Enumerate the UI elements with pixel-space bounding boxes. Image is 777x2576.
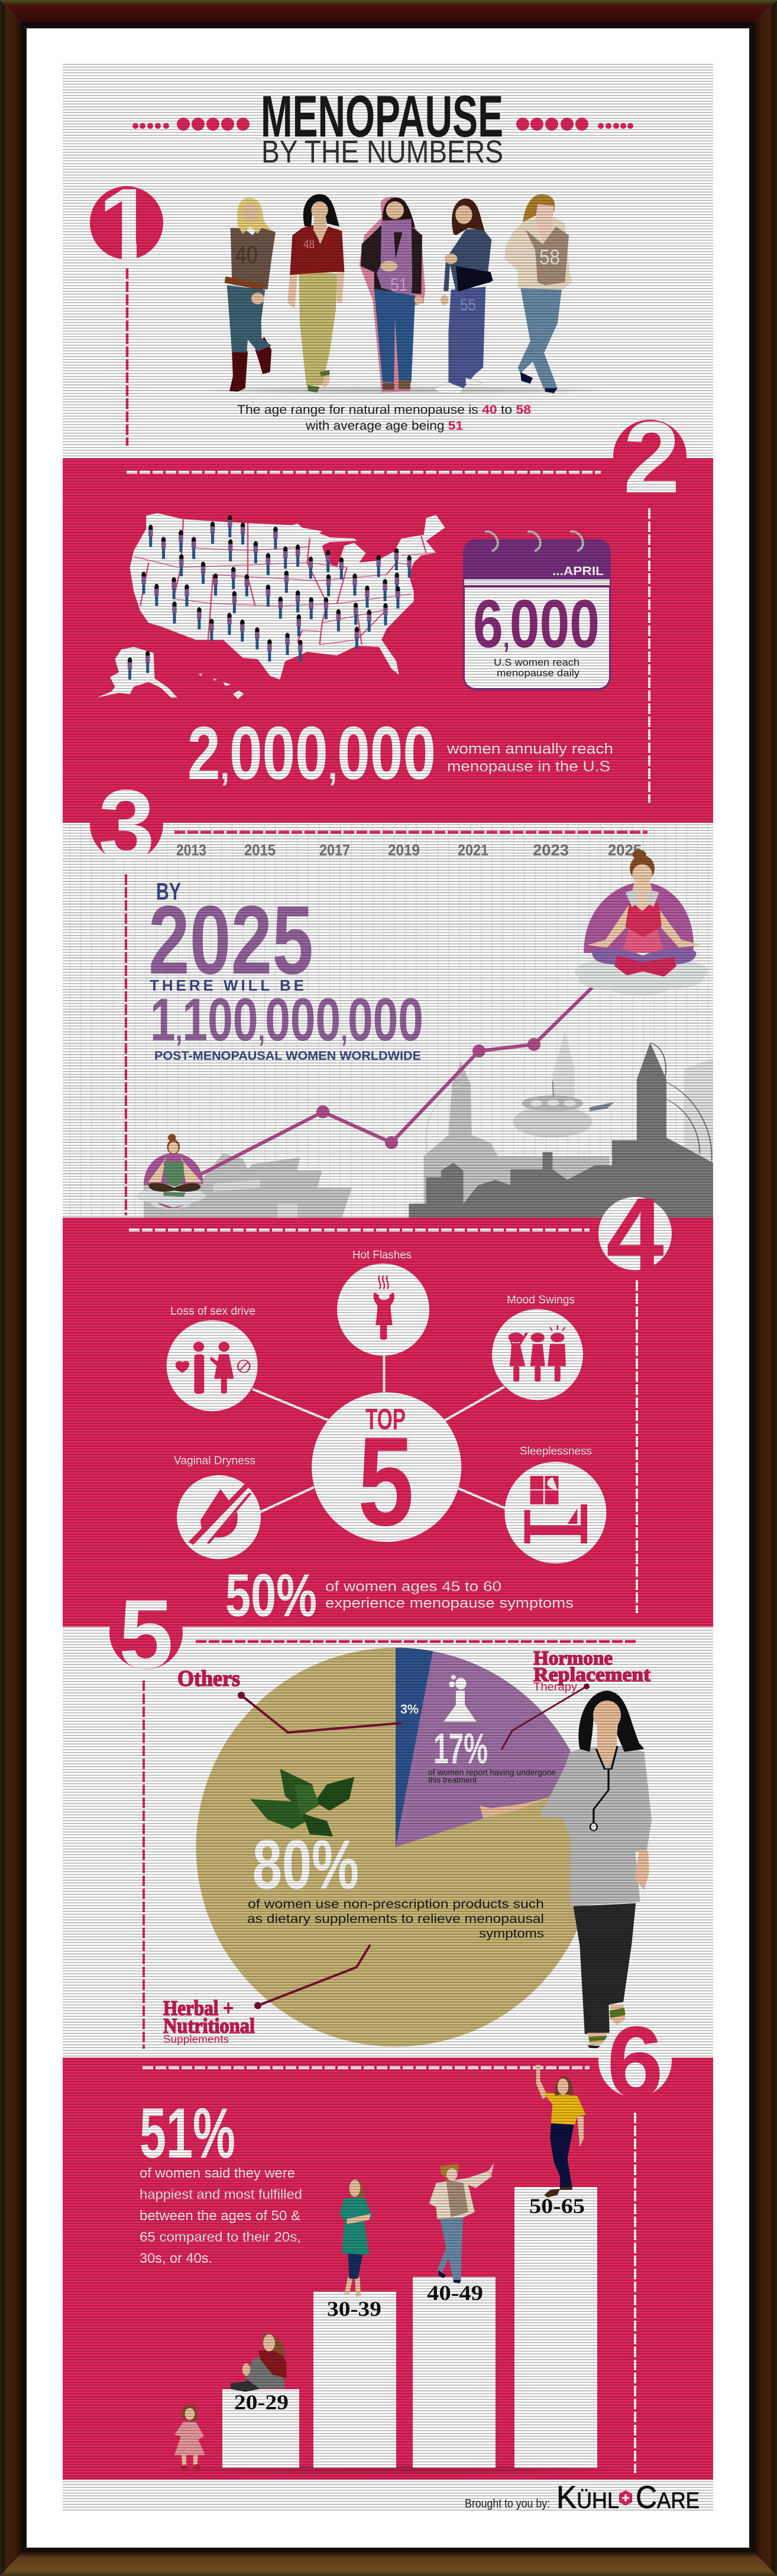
- calendar caption 1: U.S women reach: [494, 657, 579, 668]
- caption line 1: The age range for natural menopause is 40 to 58: [237, 403, 531, 417]
- dashed line horizontal: [196, 1640, 638, 1643]
- label: Mood Swings: [507, 1294, 575, 1306]
- woman doctor: [480, 1691, 652, 2048]
- Alaska: [96, 647, 177, 697]
- label: Herbal: Herbal +: [163, 1996, 234, 2020]
- bar: 20-29: [222, 2389, 299, 2468]
- icon: green leaves: [250, 1769, 354, 1837]
- year labels: [176, 841, 642, 859]
- panel: section 3 projection: [63, 823, 713, 1218]
- label: 20-29: [234, 2390, 289, 2414]
- calendar: [463, 531, 611, 690]
- figure: seated woman: [231, 2334, 286, 2392]
- icon: bed and window: [525, 1476, 587, 1543]
- pie label: 80%: 80%: [252, 1826, 359, 1904]
- stat text: post-menopausal women: POST-MENOPAUSAL WOMEN WORLDWIDE: [154, 1049, 421, 1063]
- symptom: sleeplessness: [504, 1445, 606, 1563]
- month label: ...APRIL: [552, 564, 604, 578]
- figure: girl: [174, 2405, 205, 2471]
- woman aged 40: [225, 197, 276, 392]
- contiguous states: [130, 513, 445, 680]
- stat caption 1: of women ages 45 to 60: [325, 1579, 501, 1595]
- panel: section 1 age range: [63, 64, 713, 459]
- figure: woman in green dress: [339, 2179, 373, 2296]
- stat caption: of women said they were: [140, 2165, 295, 2181]
- panel: section 5 treatments: [63, 1627, 713, 2058]
- numeral 2: 2: [623, 401, 680, 514]
- numeral 4: 4: [606, 1177, 664, 1293]
- bar: 40-49: [413, 2277, 496, 2468]
- icon: flask: [443, 1675, 477, 1722]
- stat caption 1: women annually reach: [446, 741, 613, 757]
- callout: herbal and nutritional supplements: [163, 1945, 370, 2045]
- year labels: 2021: [458, 841, 488, 859]
- symptom: loss of sex drive: [167, 1305, 258, 1412]
- label: Others: [177, 1666, 240, 1691]
- label: Replacement: Replacement: [533, 1664, 651, 1686]
- dashed line horizontal: [129, 1228, 590, 1232]
- stat: 51%: 51%: [140, 2094, 235, 2173]
- panel: section 2 US: [63, 458, 713, 823]
- Hawaii: [198, 673, 244, 699]
- stat text: by: BY: [156, 878, 181, 905]
- pie label: 3%: 3%: [400, 1702, 419, 1717]
- label: 40-49: [427, 2281, 483, 2305]
- icon: meditating woman small: [136, 1134, 206, 1209]
- calendar rings: [485, 531, 583, 551]
- hub: top 5: [312, 1393, 461, 1552]
- year labels: 2023: [533, 841, 569, 859]
- year labels: 2025: [608, 841, 642, 859]
- woman aged 48: [287, 194, 344, 392]
- icon: crossed-out drop: [188, 1484, 252, 1547]
- icon: meditating woman large: [575, 850, 708, 995]
- icon: woman with heat waves: [374, 1276, 394, 1340]
- 6,000: 6,000: [473, 586, 600, 662]
- dashed line vertical: [636, 1280, 638, 1613]
- number on woman 51: 51: [390, 274, 407, 295]
- panel: section 6 happiness: [63, 2058, 713, 2480]
- numeral 5: 5: [358, 1411, 414, 1552]
- stat text: 2025: 2025: [148, 885, 313, 994]
- bar: 50-65: [514, 2187, 597, 2468]
- callout: others: [177, 1666, 402, 1733]
- woman aged 55: [433, 199, 493, 393]
- dashed line horizontal: [143, 2066, 590, 2069]
- connector lines: [252, 1354, 506, 1512]
- figure: woman pointing: [429, 2163, 494, 2283]
- illustration: five women: [225, 194, 572, 393]
- label: Nutritional: Nutritional: [163, 2014, 255, 2038]
- dashed line vertical: [634, 2113, 636, 2473]
- logo: cross: [619, 2490, 632, 2506]
- figure: woman in yellow: [536, 2065, 586, 2197]
- pie label: 17%: 17%: [433, 1725, 488, 1773]
- decorative dots: right: [516, 118, 633, 131]
- stat text: there will be: THERE WILL BE: [150, 976, 304, 994]
- year labels: 2019: [388, 841, 420, 859]
- dashed line horizontal: [174, 831, 648, 833]
- logo: Care: CARE: [636, 2480, 700, 2515]
- dashed line vertical: [143, 1680, 145, 2049]
- year labels: 2013: [176, 841, 206, 859]
- panel: section 4 symptoms: [63, 1218, 713, 1629]
- label: 30-39: [327, 2297, 381, 2321]
- symptom: mood swings: [492, 1294, 583, 1400]
- stat caption: between the ages of 50 &: [140, 2208, 300, 2223]
- dashed line vertical: [648, 508, 650, 803]
- label: Hot Flashes: [352, 1249, 412, 1261]
- stat caption: 65 compared to their 20s,: [140, 2229, 301, 2244]
- numeral 3: 3: [98, 769, 155, 883]
- 17% caption second line: this treatment: [428, 1775, 477, 1785]
- numeral 6: 6: [607, 2006, 663, 2119]
- dashed line: [126, 268, 128, 446]
- footer: [63, 2480, 713, 2515]
- number on woman 40: 40: [235, 241, 258, 268]
- dashed line vertical: [125, 874, 127, 1215]
- floor shadow: [148, 2465, 633, 2474]
- icon: couple with broken heart: [176, 1342, 250, 1394]
- 80% caption 1: of women use non-prescription products such: [248, 1897, 544, 1911]
- number on woman 48: 48: [303, 238, 315, 251]
- subtitle: by the numbers: BY THE NUMBERS: [261, 134, 503, 170]
- label: Sleeplessness: [520, 1445, 592, 1458]
- symptom: hot flashes: [337, 1249, 429, 1356]
- title: Menopause: MENOPAUSE: [261, 83, 503, 149]
- woman aged 51 highlighted: [360, 197, 425, 392]
- caption line 2: with average age being 51: [305, 419, 463, 433]
- numeral 1: [90, 186, 163, 259]
- floor shadow: [191, 386, 617, 394]
- decorative dots: left: [132, 118, 250, 131]
- stat caption: happiest and most fulfilled: [140, 2186, 302, 2202]
- 17% caption: of women report having undergone: [428, 1767, 556, 1777]
- calendar caption 2: menopause daily: [497, 667, 580, 679]
- symptom: vaginal dryness: [174, 1455, 261, 1559]
- dashed line horizontal: [127, 471, 601, 474]
- line chart: [196, 986, 594, 1177]
- stat caption: 30s, or 40s.: [140, 2250, 212, 2266]
- label: Therapy: Therapy: [533, 1681, 578, 1693]
- state borders: [134, 519, 436, 644]
- label: Hormone: Hormone: [533, 1647, 613, 1669]
- stat caption: [140, 2165, 302, 2266]
- label: Supplements: Supplements: [163, 2033, 229, 2045]
- 80% caption 3: symptoms: [479, 1927, 544, 1941]
- stat: 50%: 50%: [225, 1562, 317, 1629]
- callout: hormone replacement therapy: [501, 1647, 651, 1750]
- numeral 5: 5: [119, 1580, 173, 1689]
- logo: Kuhl: KÜHL: [556, 2480, 619, 2515]
- year labels: 2015: [244, 841, 276, 859]
- numeral 1: 1: [98, 167, 155, 281]
- icon: three women: [508, 1325, 566, 1381]
- stat caption 2: menopause in the U.S: [447, 758, 610, 775]
- number on woman 55: 55: [460, 296, 476, 314]
- bar: 30-39: [313, 2292, 396, 2468]
- US map: [96, 513, 445, 699]
- TOP label: TOP: [365, 1403, 406, 1436]
- stat caption 2: experience menopause symptoms: [325, 1595, 574, 1611]
- 80% caption 2: as dietary supplements to relieve menopausal: [247, 1912, 544, 1926]
- number on woman 58: 58: [539, 246, 560, 269]
- pie chart: [196, 1648, 595, 2046]
- tiny women markers: [128, 515, 412, 680]
- brought to you by: Brought to you by:: [465, 2497, 550, 2510]
- stat: 2,000,000: 2,000,000: [187, 711, 436, 795]
- stat text: 1,100,000,000: 1,100,000,000: [150, 986, 423, 1053]
- label: Vaginal Dryness: [174, 1455, 255, 1467]
- city skyline: [144, 1032, 713, 1218]
- woman aged 58: [504, 194, 572, 393]
- label: 50-65: [529, 2194, 585, 2218]
- label: Loss of sex drive: [170, 1305, 255, 1318]
- year labels: 2017: [319, 841, 350, 859]
